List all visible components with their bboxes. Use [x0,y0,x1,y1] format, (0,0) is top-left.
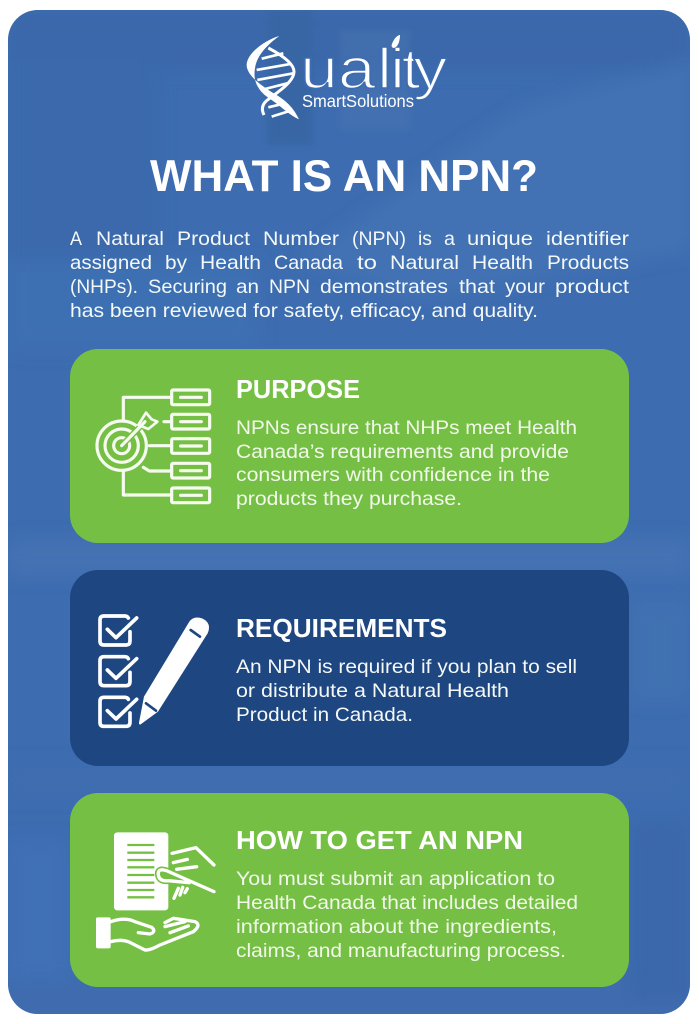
body text: information about the ingredients, [236,916,557,938]
intro paragraph: has been reviewed for safety, efficacy, and quality. [70,300,538,322]
body text: You must submit an application to [236,868,555,890]
intro paragraph: Natural [390,252,459,274]
body text: consumers with confidence in the [236,464,550,486]
body text: Health Canada that includes detailed [236,892,578,914]
intro paragraph: Health [472,252,533,274]
intro paragraph: NPN [269,276,310,298]
intro paragraph: a [444,228,455,250]
icon: DNA helix [247,36,299,119]
intro paragraph: (NHPs). [70,276,138,298]
panel: purpose [70,349,629,543]
logo [247,35,447,119]
icon: target with boxes [97,390,210,503]
heading: PURPOSE [236,374,360,404]
intro paragraph: Natural [96,228,164,250]
heading: REQUIREMENTS [236,613,447,643]
intro paragraph: by [165,252,187,274]
body text: Canada’s requirements and provide [236,441,569,463]
intro paragraph: assigned [70,252,152,274]
panel: requirements [70,570,629,766]
intro paragraph: is [418,228,432,250]
body text: claims, and manufacturing process. [236,940,566,962]
heading: HOW TO GET AN NPN [236,825,523,855]
logo subtitle: SmartSolutions [302,91,414,111]
intro paragraph: Products [547,252,629,274]
body text: An NPN is required if you plan to sell [236,656,577,678]
body text [236,656,577,726]
intro paragraph: that [459,276,496,298]
intro paragraph: demonstrates [320,276,448,298]
body text: products they purchase. [236,488,462,510]
intro paragraph: product [555,276,630,298]
intro paragraph: an [236,276,259,298]
body text [236,868,578,962]
intro paragraph: Canada [274,252,343,274]
panel: how to get an NPN [70,793,629,987]
icon: document and hands [96,832,214,950]
intro paragraph: Securing [148,276,227,298]
intro paragraph: to [357,252,377,274]
body text: Product in Canada. [236,704,413,726]
intro paragraph: your [505,276,546,298]
body text [236,417,577,510]
icon: checklist and pencil [100,616,209,726]
intro paragraph: Health [200,252,261,274]
intro paragraph: identifier [546,228,630,250]
intro paragraph: Product [177,228,251,250]
title: WHAT IS AN NPN? [150,152,538,201]
intro paragraph: (NPN) [352,228,406,250]
body text: or distribute a Natural Health [236,680,509,702]
logo wordmark: uality [300,38,447,101]
body text: NPNs ensure that NHPs meet Health [236,417,577,439]
intro paragraph: Number [263,228,340,250]
intro paragraph: A [70,228,82,250]
intro paragraph: unique [467,228,533,250]
icon: leaf [392,35,400,48]
intro paragraph [70,228,630,322]
